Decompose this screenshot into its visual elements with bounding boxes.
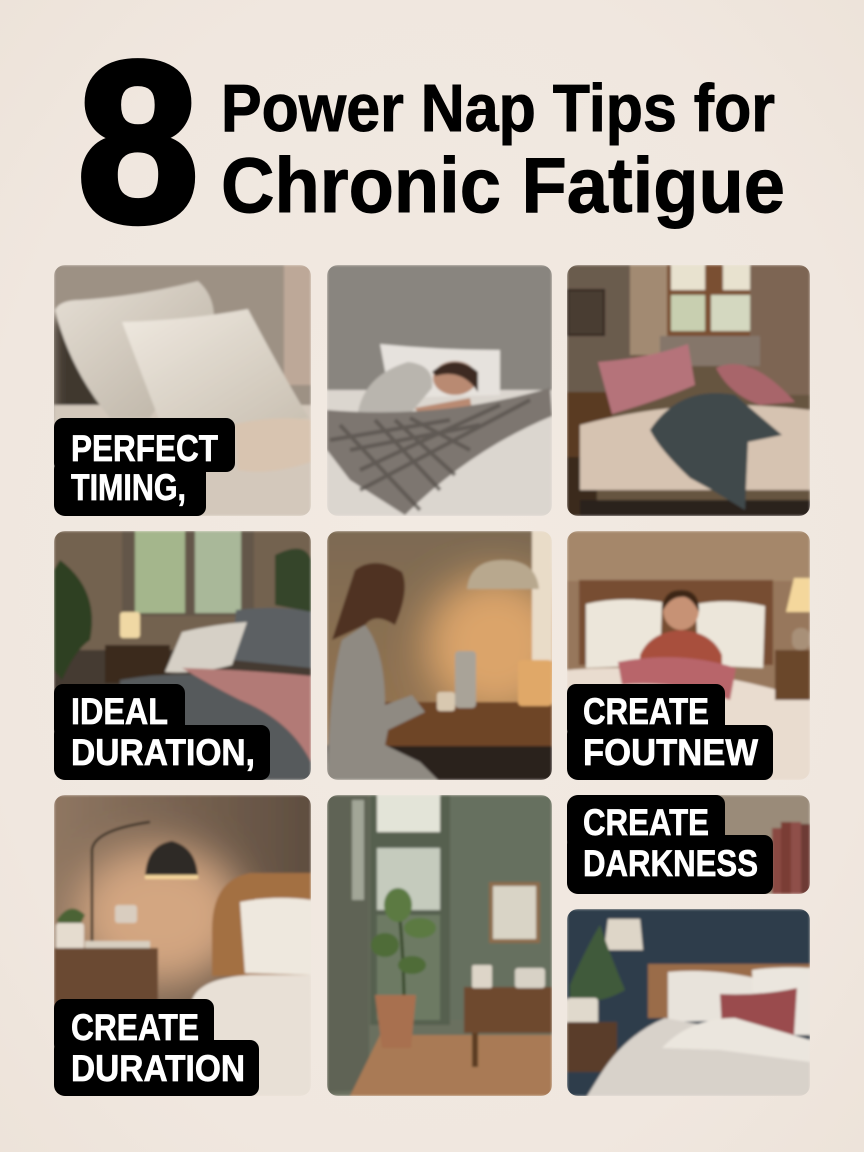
icon: desk lamp — [92, 822, 198, 945]
title line 1: Power Nap Tips for — [221, 71, 775, 146]
title — [77, 14, 785, 270]
label: CREATE — [71, 1007, 199, 1048]
label: DURATION, — [71, 732, 255, 773]
icon: window with blinds — [122, 531, 254, 616]
icon: pillows — [380, 344, 500, 398]
icon: nightstand — [464, 965, 552, 1067]
icon: plant — [371, 888, 436, 995]
icon: window — [370, 795, 450, 1025]
side table — [105, 645, 170, 683]
icon: pillow — [240, 898, 311, 975]
icon: front pillow — [122, 309, 309, 424]
label: CREATE — [583, 802, 709, 843]
icon: dark blanket — [650, 393, 782, 510]
label — [54, 684, 270, 780]
photo: bedroom with window — [54, 531, 311, 780]
icon: sleeping woman — [358, 361, 478, 416]
label: CREATE — [583, 691, 709, 732]
label — [54, 999, 259, 1096]
label: TIMING, — [71, 467, 186, 508]
icon: pink pillow — [598, 344, 695, 414]
label: DURATION — [71, 1048, 245, 1089]
icon: headboard — [212, 873, 311, 976]
icon: framed picture — [489, 882, 540, 943]
nightstand — [567, 392, 612, 457]
photo: woman at desk — [327, 531, 565, 780]
photo: wall and books — [567, 795, 810, 894]
icon: seated woman — [327, 563, 438, 780]
label: PERFECT — [71, 428, 218, 469]
icon: plant — [54, 560, 92, 680]
icon: bed — [587, 1018, 810, 1096]
panel: ideal duration — [54, 531, 311, 780]
photo: sleeping woman — [327, 265, 552, 516]
icon: wall outlet — [115, 905, 137, 923]
panel: woman at desk — [327, 531, 565, 780]
photo: white pillows — [54, 265, 311, 516]
icon: woman in bed — [640, 590, 722, 675]
icon: white pillows — [668, 971, 755, 1022]
icon: desk objects — [437, 651, 552, 711]
label — [567, 795, 773, 894]
side table — [567, 1022, 617, 1072]
icon: wall picture — [568, 290, 604, 335]
icon: nightstand — [54, 941, 158, 1018]
panel: navy wall bedroom — [567, 909, 810, 1096]
icon: headboard — [579, 580, 773, 665]
panel: create foutnew — [567, 531, 810, 780]
icon: lamp — [604, 919, 643, 950]
blanket fold — [235, 418, 311, 472]
label — [54, 418, 235, 516]
icon: pillows — [232, 608, 311, 668]
panel: woman sleeping under plaid blanket — [327, 265, 552, 516]
photo: woman in bed — [567, 531, 810, 780]
icon: pendant lamp — [467, 560, 539, 589]
bed — [580, 405, 810, 490]
label — [567, 684, 773, 780]
icon: back pillow — [55, 281, 214, 418]
icon: bed — [192, 975, 311, 1096]
icon: bed with blanket — [567, 668, 810, 780]
icon: wood floor — [350, 1035, 552, 1096]
icon: potted plant — [56, 909, 85, 950]
panel: create darkness — [567, 795, 810, 894]
icon: lamp — [120, 612, 140, 638]
label: IDEAL — [71, 691, 168, 732]
icon: books — [772, 822, 810, 894]
icon: desk — [378, 702, 552, 746]
icon: plant pot — [375, 995, 416, 1048]
label: FOUTNEW — [583, 732, 758, 773]
photo: navy bedroom — [567, 909, 810, 1096]
label: DARKNESS — [583, 843, 758, 884]
title line 2: Chronic Fatigue — [221, 141, 785, 229]
icon: window — [667, 265, 755, 336]
icon: pink throw — [182, 668, 311, 762]
photo: room — [327, 795, 552, 1096]
icon: bedside lamp — [786, 578, 810, 650]
panel: bed with window — [567, 265, 810, 516]
icon: door — [327, 795, 369, 1092]
icon: plant — [567, 925, 625, 1030]
photo: lamp and bed — [54, 795, 311, 1096]
icon: bed — [120, 674, 311, 780]
icon: headboard — [648, 964, 810, 1018]
panel: create duration — [54, 795, 311, 1096]
big number 8: 8 — [77, 14, 199, 270]
icon: pillows — [586, 599, 662, 668]
photo: bedroom — [567, 265, 810, 516]
icon: red pillow — [720, 988, 797, 1036]
panel: perfect timing — [54, 265, 311, 516]
panel: room with door and plant — [327, 795, 552, 1096]
icon: plaid blanket — [327, 388, 552, 515]
